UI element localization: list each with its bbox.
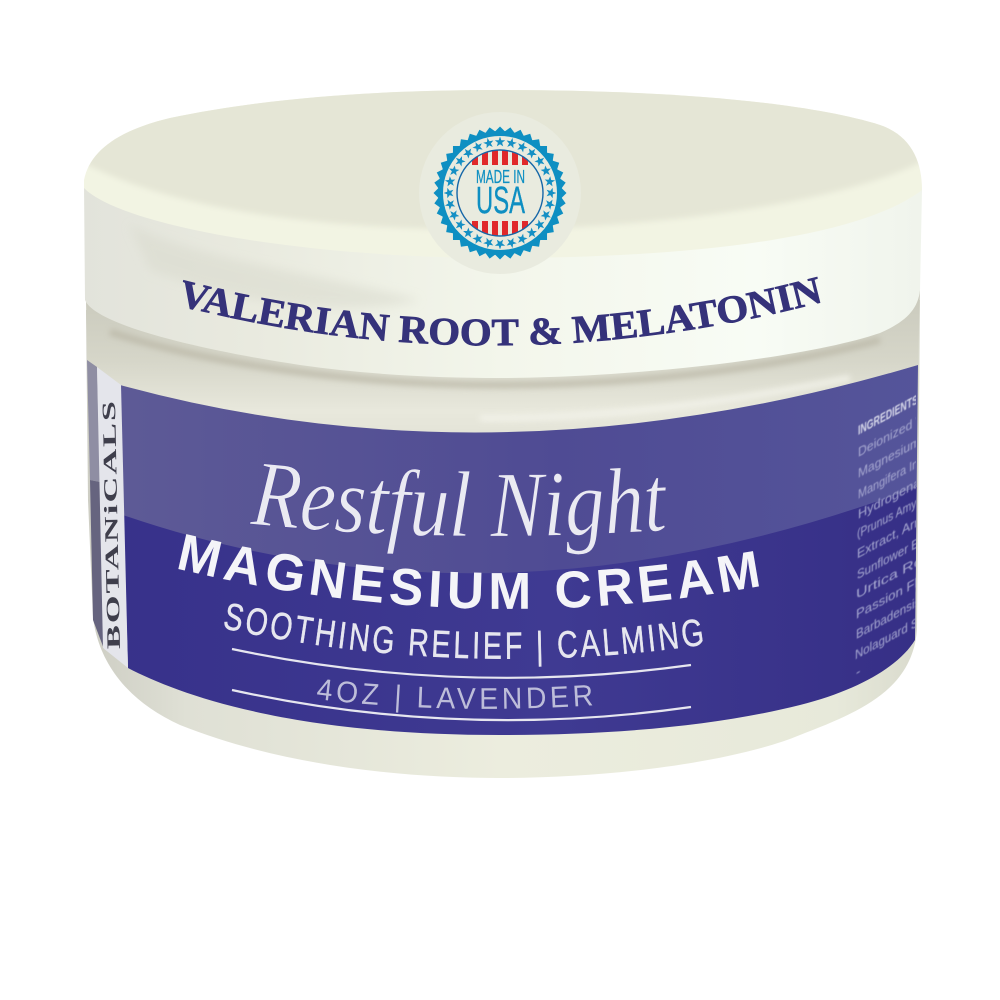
product jar infographic — [84, 90, 922, 778]
upper rule — [232, 649, 691, 678]
label text block — [178, 464, 759, 722]
ingredients list: - — [856, 663, 860, 680]
neck shadow below lid — [110, 332, 880, 385]
badge backing circle — [419, 112, 581, 274]
script title: Restful Night — [250, 464, 666, 554]
ingredients list: Barbadensis Leaf — [856, 579, 946, 642]
brand name: BOTANiCALS — [102, 402, 120, 649]
strip left shadow lower — [90, 480, 104, 649]
ingredients list: Extract, Arnica — [857, 504, 937, 561]
ingredients list: Passion Flower — [856, 559, 946, 622]
ingredients list: Mangifera Indica — [858, 444, 938, 502]
lid top face — [90, 90, 918, 228]
serrated teeth — [434, 126, 566, 260]
label upper lighter panel — [121, 365, 918, 640]
ingredients list: Nolaguard SOE — [855, 605, 935, 662]
jar body — [86, 290, 920, 778]
usa text: USA — [476, 180, 525, 222]
ingredients list: Urtica Root — [856, 544, 936, 602]
ingredients list: Hydrogenated — [858, 464, 938, 522]
ingredients list: Deionized Water — [858, 397, 948, 460]
product label — [121, 365, 918, 735]
strip left shadow upper — [87, 360, 100, 482]
lower rule — [232, 690, 691, 720]
white strip — [97, 367, 128, 668]
lid rim — [84, 90, 922, 258]
jar lid — [78, 70, 925, 378]
blue outer ring — [440, 134, 560, 252]
lid headline: VALERIAN ROOT & MELATONIN — [182, 276, 820, 346]
ingredients list: Magnesium Oil — [858, 423, 938, 481]
made in text: MADE IN — [476, 167, 525, 187]
ring of stars — [444, 136, 556, 250]
brand strip — [87, 360, 128, 668]
neck gloss highlight — [480, 378, 850, 418]
inner circle — [457, 150, 543, 236]
subtitle: SOOTHING RELIEF | CALMING — [224, 604, 703, 667]
label lower darker panel — [124, 487, 917, 735]
ingredients list: INGREDIENTS — [858, 391, 918, 438]
lid side band — [84, 185, 922, 378]
size and scent: 4OZ | LAVENDER — [317, 680, 592, 713]
main title: MAGNESIUM CREAM — [178, 534, 759, 609]
jar neck — [86, 290, 920, 432]
ingredients list: Sunflower Extract — [857, 519, 947, 582]
lid band shaded patch — [130, 225, 420, 308]
ingredients list — [855, 394, 916, 674]
ingredients list: (Prunus Amygdalus — [857, 478, 947, 541]
red stripes — [472, 150, 528, 236]
made in usa badge — [419, 112, 581, 274]
